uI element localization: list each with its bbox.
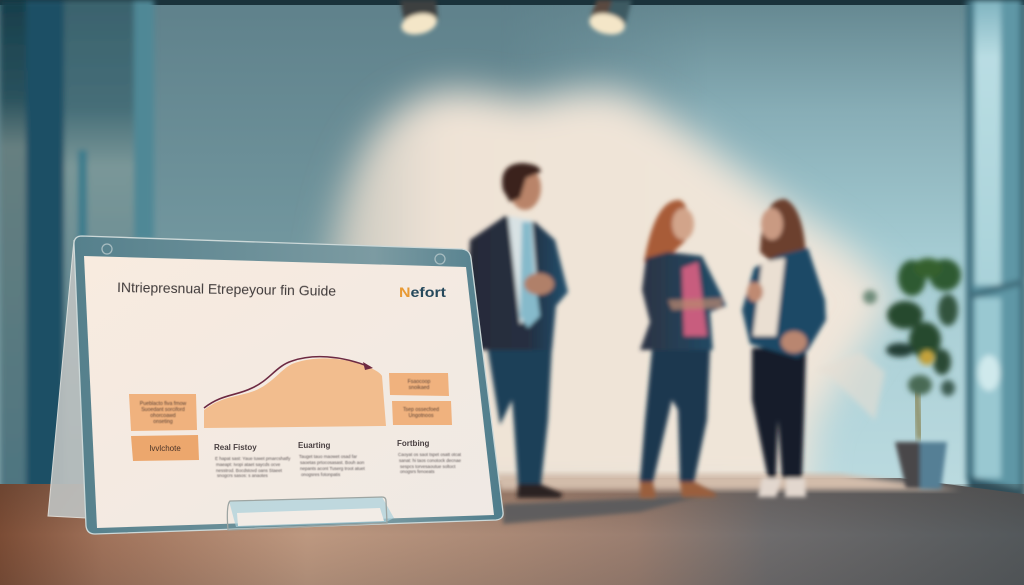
right text box top — [389, 373, 449, 396]
column: Real Fistoy: nesstrod. Bocdstovd oans Staeet — [216, 468, 283, 473]
woman with dark hair — [742, 199, 826, 497]
column: Real Fistoy: Real Fistoy — [214, 443, 257, 452]
stand base clip — [227, 497, 394, 530]
column: Fortbing: sespcs torvesaoutue soltoct — [400, 464, 456, 469]
column: Euarting: saoetas prtocosasast. Bouh aon — [300, 460, 365, 465]
frame mounting pins — [102, 244, 445, 264]
right text box bottom: Tsep ossecfoed — [403, 407, 439, 413]
stand rear leaf — [48, 240, 86, 518]
column: Fortbing: Caoyat os saot tspet osatt otcat — [398, 452, 462, 457]
left text box: Suoedant sorciford — [141, 407, 185, 413]
man in suit — [468, 163, 568, 498]
woman with red hair — [640, 200, 726, 498]
left text box: ohorcoawd — [150, 413, 176, 419]
left text box: onseting — [153, 419, 173, 425]
ceiling spotlights — [399, 0, 632, 38]
right text box bottom — [392, 401, 452, 425]
left label box — [131, 435, 199, 461]
column: Real Fistoy: snogcrs sasos: s anaotes — [217, 473, 269, 478]
card title: INtriepresnual Etrepeyour fin Guide — [117, 280, 336, 299]
column: Real Fistoy: E hapat sast: Yaue tuwet pmarcshatfy — [215, 456, 291, 461]
right window — [966, 0, 1024, 498]
paper sheet — [84, 256, 494, 528]
column: Euarting — [298, 441, 366, 477]
column: Euarting: nepants acont Tuserg troot atuet — [300, 466, 366, 471]
plant shadow on wall — [815, 290, 885, 420]
column: Fortbing: Fortbing — [397, 439, 430, 448]
left glass partition — [0, 0, 154, 490]
column: Fortbing: onogsrs fenoeats — [400, 469, 435, 474]
column: Euarting: Euarting — [298, 441, 331, 450]
right text box top: snoikaed — [409, 385, 429, 391]
column: Euarting: Tauget tauo maowet osad far — [299, 454, 358, 459]
left label box: Ivvlchote — [149, 444, 181, 453]
glass frame — [74, 236, 503, 534]
right text box top: Fsaocoop — [408, 379, 430, 385]
right text box bottom: Ungotnoos — [408, 413, 434, 419]
blurred floor — [0, 474, 1024, 585]
column: Fortbing — [397, 439, 462, 474]
column: Real Fistoy: maeapt: Ivopi ataet saycds ocve — [216, 462, 281, 467]
column: Euarting: onogsres fotonpatis — [301, 472, 341, 477]
left text box: Pueblacto fiva fmow — [140, 401, 186, 407]
acrylic card stand — [48, 236, 503, 534]
column: Real Fistoy — [214, 443, 291, 478]
left text box — [129, 394, 197, 431]
column: Fortbing: sanat: hi taos conotock decnae — [399, 458, 462, 463]
potted plant — [886, 258, 961, 489]
area chart with arrow — [204, 357, 386, 428]
card logo: Nefort — [399, 284, 446, 300]
